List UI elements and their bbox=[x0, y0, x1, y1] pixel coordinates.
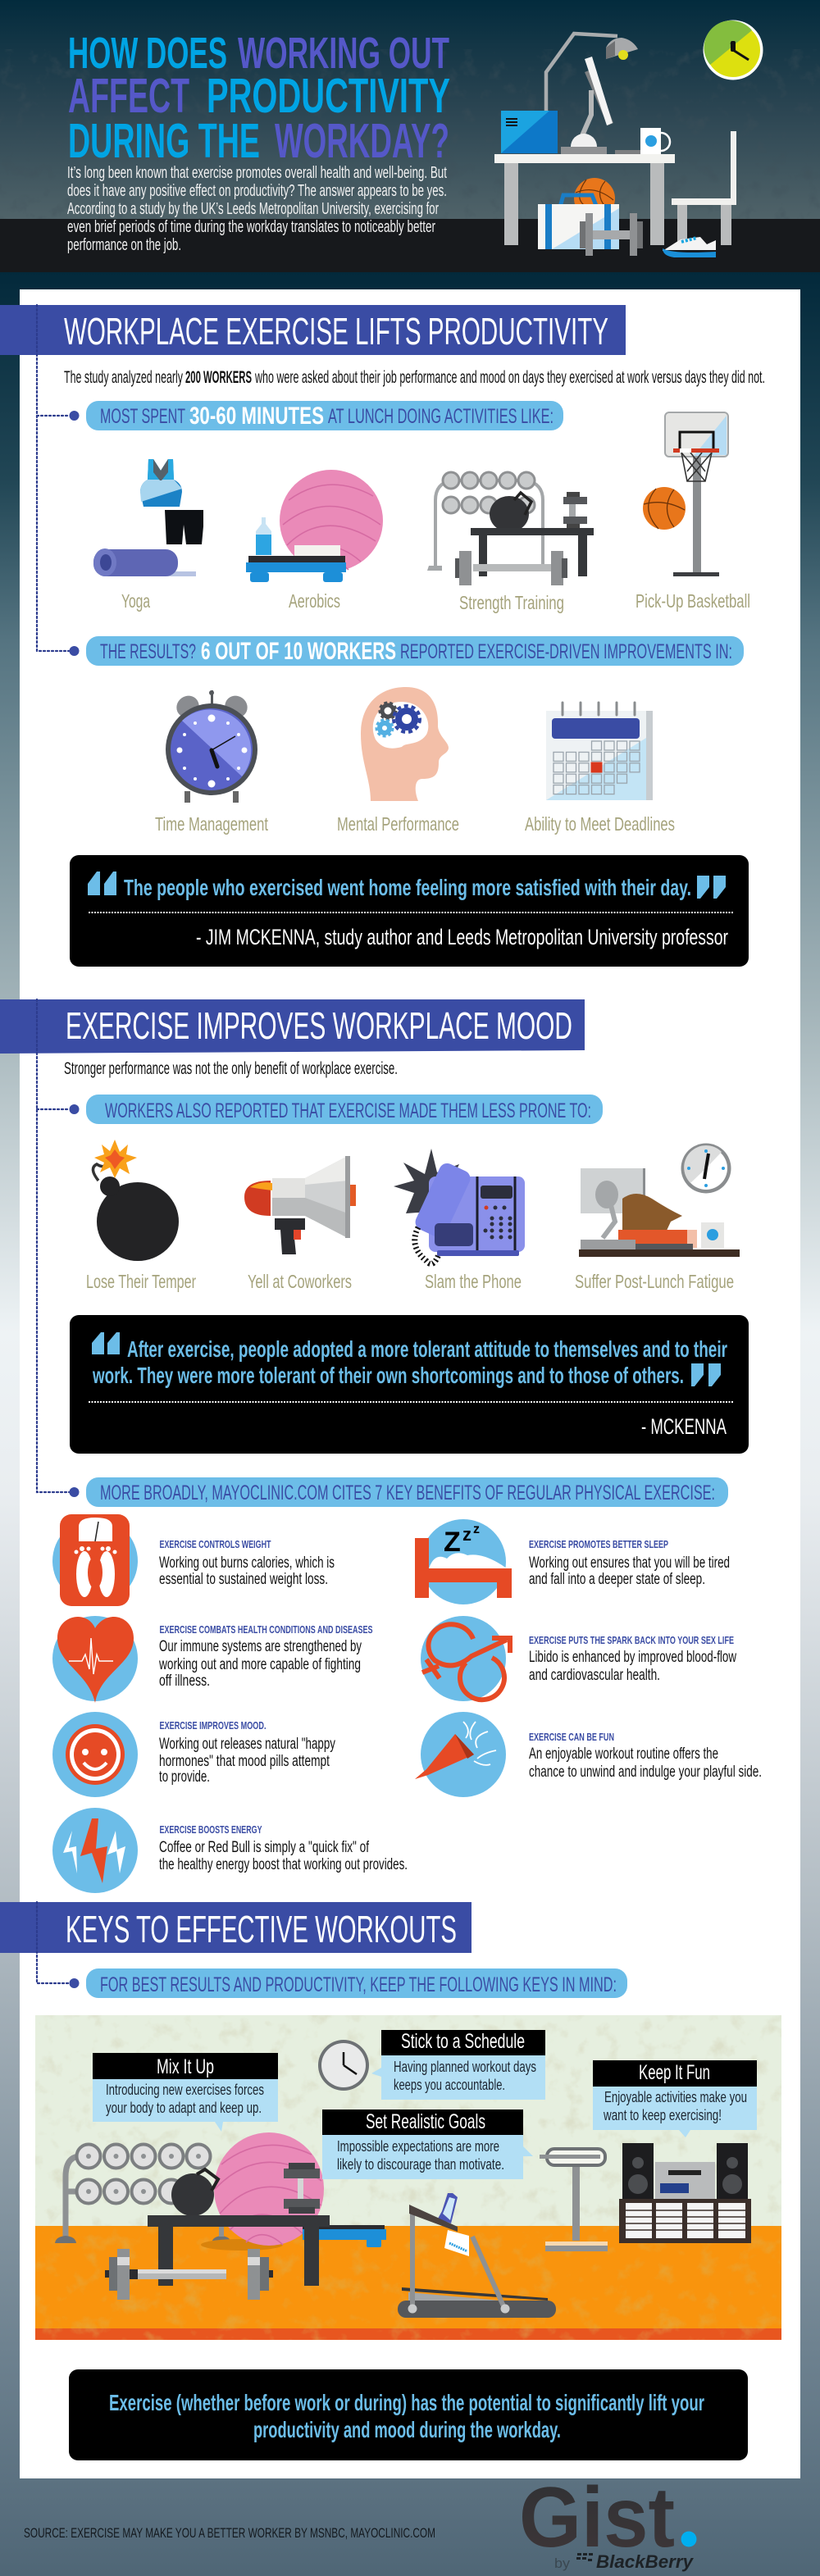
icon: smiley bbox=[52, 1712, 138, 1797]
intro text bbox=[64, 368, 765, 387]
icon: monitor bbox=[561, 57, 651, 154]
callout: stick to a schedule bbox=[371, 2030, 545, 2100]
callout: keep it fun bbox=[593, 2060, 757, 2137]
icon: bench bbox=[148, 2215, 330, 2286]
icon: mug bbox=[640, 128, 670, 154]
icon: bed with zzz: z bbox=[473, 1522, 480, 1536]
text: boosts energy: Coffee or Red Bull is simply a "quick fix" of bbox=[159, 1839, 370, 1856]
icon: alarm clock bbox=[166, 690, 257, 803]
text: combats health conditions: off illness. bbox=[159, 1673, 210, 1690]
callout: set realistic goals: likely to discourage than motivate. bbox=[337, 2156, 504, 2173]
title: WORKDAY? bbox=[275, 114, 449, 168]
text: improves mood: to provide. bbox=[159, 1768, 210, 1786]
icon: gender symbols bbox=[421, 1616, 510, 1701]
icon: mirror stand bbox=[540, 2149, 608, 2251]
connector line bbox=[37, 999, 79, 1497]
text: combats health conditions: EXERCISE COMBATS HEALTH CONDITIONS AND DISEASES bbox=[159, 1623, 373, 1636]
icon: bed with zzz bbox=[415, 1519, 512, 1604]
label: suffer post-lunch fatigue: Suffer Post-Lunch Fatigue bbox=[575, 1271, 734, 1292]
text: improves mood bbox=[159, 1719, 335, 1786]
benefit: combats health conditions bbox=[52, 1616, 373, 1703]
text: improves mood: hormones" that mood pills attempt bbox=[159, 1753, 330, 1770]
icon: lamp bbox=[546, 34, 638, 111]
benefit: better sleep bbox=[415, 1519, 730, 1604]
text: improves mood: EXERCISE IMPROVES MOOD. bbox=[159, 1719, 266, 1732]
callout: mix it up: Mix It Up bbox=[157, 2055, 214, 2078]
benefit: sex life bbox=[421, 1616, 736, 1701]
pill: the results: 6 OUT OF 10 WORKERS bbox=[201, 638, 396, 665]
label: mental performance: Mental Performance bbox=[337, 813, 459, 835]
intro paragraph: performance on the job. bbox=[67, 236, 181, 254]
icon: dumbbell bbox=[284, 2163, 320, 2214]
callout: mix it up: your body to adapt and keep up. bbox=[106, 2100, 262, 2116]
text: better sleep: Working out ensures that you will be tired bbox=[529, 1554, 730, 1572]
callout: keep it fun: Keep It Fun bbox=[639, 2061, 710, 2084]
text: combats health conditions: working out and more capable of fighting bbox=[158, 1656, 361, 1673]
callout: set realistic goals bbox=[322, 2109, 533, 2179]
intro paragraph: It’s long been known that exercise promotes overall health and well-being. But bbox=[67, 164, 447, 182]
benefit: controls weight bbox=[52, 1514, 335, 1606]
text: boosts energy bbox=[159, 1823, 408, 1873]
icon: desk bbox=[494, 154, 675, 245]
icon: tired worker at desk bbox=[579, 1143, 740, 1257]
icon: telephone bbox=[394, 1149, 525, 1264]
callout: mix it up: Introducing new exercises forces bbox=[106, 2082, 264, 2098]
intro paragraph: even brief periods of time during the workday translates to noticeably better bbox=[67, 218, 435, 236]
connector line bbox=[37, 1902, 79, 1988]
callout: stick to a schedule: keeps you accountable. bbox=[394, 2077, 505, 2093]
callout: mix it up bbox=[93, 2053, 278, 2132]
benefit: improves mood bbox=[52, 1712, 335, 1797]
icon: head with gears bbox=[361, 687, 449, 801]
section: keys to effective workouts bbox=[0, 1902, 781, 2460]
icon: yoga gear bbox=[93, 459, 203, 576]
text: sex life: Libido is enhanced by improved blood-flow bbox=[529, 1649, 736, 1666]
icon: aerobics ball and step bbox=[246, 470, 383, 582]
icon: sneaker bbox=[663, 237, 716, 257]
conclusion box bbox=[69, 2369, 748, 2460]
text: sex life bbox=[529, 1634, 736, 1684]
icon: step platform bbox=[303, 2225, 386, 2247]
text: better sleep bbox=[529, 1538, 730, 1588]
text: sex life: EXERCISE PUTS THE SPARK BACK INTO YOUR SEX LIFE bbox=[529, 1634, 734, 1646]
icon: treadmill bbox=[398, 2193, 556, 2318]
intro paragraph: According to a study by the UK’s Leeds Metropolitan University, exercising for bbox=[67, 200, 439, 218]
text: boosts energy: EXERCISE BOOSTS ENERGY bbox=[159, 1823, 262, 1836]
callout: keep it fun: want to keep exercising! bbox=[603, 2107, 722, 2123]
icon: kettlebell bbox=[171, 2169, 218, 2216]
text: sex life: and cardiovascular health. bbox=[529, 1667, 660, 1684]
icon: bed with zzz: z bbox=[462, 1524, 472, 1545]
title: HOW DOES bbox=[68, 29, 227, 78]
intro text: The study analyzed nearly bbox=[64, 368, 183, 387]
icon: exercise ball bbox=[201, 2132, 324, 2251]
text: combats health conditions: Our immune systems are strengthened by bbox=[159, 1638, 362, 1655]
intro paragraph: does it have any positive effect on productivity? The answer appears to be yes. bbox=[67, 182, 447, 200]
callout: set realistic goals: Set Realistic Goals bbox=[366, 2110, 485, 2133]
icon: chair bbox=[672, 131, 736, 245]
title: AFFECT bbox=[68, 69, 189, 123]
icon: bomb bbox=[93, 1140, 179, 1261]
quote box: McKenna 2 bbox=[70, 1315, 749, 1454]
pill: seven key benefits bbox=[86, 1477, 728, 1507]
label: lose their temper: Lose Their Temper bbox=[86, 1271, 196, 1292]
title: PRODUCTIVITY bbox=[207, 69, 450, 123]
text: can be fun: EXERCISE CAN BE FUN bbox=[529, 1731, 614, 1743]
conclusion box: productivity and mood during the workday. bbox=[253, 2417, 561, 2442]
section: workplace exercise lifts productivity bbox=[0, 305, 765, 967]
label: strength training: Strength Training bbox=[459, 592, 564, 613]
label: yoga: Yoga bbox=[121, 590, 150, 612]
text: controls weight: EXERCISE CONTROLS WEIGHT bbox=[159, 1538, 271, 1550]
heading bar bbox=[0, 1902, 472, 1953]
pill: best results bbox=[86, 1968, 627, 1998]
callout: set realistic goals: Impossible expectations are more bbox=[337, 2138, 499, 2155]
icon: weight rack bbox=[55, 2145, 231, 2243]
logo: Gist by BlackBerry: Gist bbox=[519, 2470, 675, 2565]
icon: office desk scene bbox=[494, 20, 763, 257]
icon: bed with zzz: Z bbox=[444, 1527, 461, 1558]
benefit: can be fun bbox=[415, 1712, 762, 1797]
callout: keep it fun: Enjoyable activities make you bbox=[604, 2089, 747, 2105]
pill: the results: THE RESULTS? bbox=[100, 640, 196, 663]
icon: basketball bbox=[574, 178, 615, 219]
text: can be fun: An enjoyable workout routine offers the bbox=[529, 1745, 718, 1763]
label: slam the phone: Slam the Phone bbox=[425, 1271, 522, 1292]
header band bbox=[0, 0, 820, 272]
heading bar: KEYS TO EFFECTIVE WORKOUTS bbox=[66, 1908, 457, 1950]
intro text: Stronger performance was not the only benefit of workplace exercise. bbox=[64, 1059, 398, 1078]
icon: barbell bbox=[105, 2249, 273, 2300]
label: yell at coworkers: Yell at Coworkers bbox=[248, 1271, 352, 1292]
quote box: McKenna 2: - MCKENNA bbox=[641, 1414, 727, 1439]
icon: dumbbell bbox=[580, 213, 643, 256]
pill: most spent: AT LUNCH DOING ACTIVITIES LIKE: bbox=[328, 405, 554, 428]
icon: megaphone bbox=[244, 1156, 356, 1254]
pill: most spent: 30-60 MINUTES bbox=[189, 403, 324, 430]
callout: stick to a schedule: Stick to a Schedule bbox=[401, 2030, 525, 2053]
pill: the results bbox=[86, 636, 744, 666]
icon: stereo and shelf bbox=[619, 2143, 751, 2243]
icon: schedule clock bbox=[318, 2040, 369, 2091]
heading bar bbox=[0, 305, 626, 355]
pill: most spent: MOST SPENT bbox=[100, 405, 185, 428]
text: better sleep: and fall into a deeper state of sleep. bbox=[529, 1571, 705, 1588]
icon: basketball hoop bbox=[643, 412, 728, 576]
source line: SOURCE: EXERCISE MAY MAKE YOU A BETTER WORKER BY MSNBC, MAYOCLINIC.COM bbox=[24, 2525, 435, 2541]
label: ability to meet deadlines: Ability to Meet Deadlines bbox=[525, 813, 675, 835]
icon: weights rack, bench and barbell bbox=[427, 472, 594, 585]
quote box: McKenna 1 bbox=[70, 855, 749, 967]
intro text: 200 WORKERS bbox=[185, 368, 252, 387]
gym scene panel bbox=[35, 2015, 781, 2340]
icon: party horn bbox=[415, 1712, 506, 1797]
title: WORKING OUT bbox=[238, 29, 449, 78]
label: time management: Time Management bbox=[155, 813, 268, 835]
text: controls weight bbox=[159, 1538, 335, 1588]
icon: gym bag bbox=[538, 195, 619, 249]
heading bar bbox=[0, 999, 585, 1054]
benefit: boosts energy bbox=[52, 1808, 408, 1893]
label: aerobics: Aerobics bbox=[289, 590, 340, 612]
text: controls weight: Working out burns calories, which is bbox=[159, 1554, 335, 1572]
section: exercise improves workplace mood bbox=[0, 999, 762, 1893]
text: can be fun bbox=[529, 1731, 762, 1781]
logo: Gist by BlackBerry: BlackBerry bbox=[596, 2551, 695, 2572]
text: combats health conditions bbox=[158, 1623, 373, 1690]
icon: computer tower bbox=[501, 111, 558, 153]
callout: stick to a schedule: Having planned workout days bbox=[394, 2059, 536, 2075]
icon: calendar bbox=[546, 703, 653, 800]
icon: bathroom scale bbox=[52, 1514, 138, 1606]
pill: less prone bbox=[86, 1095, 603, 1124]
text: improves mood: Working out releases natural "happy bbox=[159, 1736, 335, 1753]
icon: heart bbox=[52, 1616, 138, 1703]
title bbox=[68, 29, 450, 168]
title: DURING THE bbox=[68, 114, 260, 168]
text: boosts energy: the healthy energy boost that working out provides. bbox=[159, 1856, 408, 1873]
connector line bbox=[37, 305, 79, 656]
text: controls weight: essential to sustained weight loss. bbox=[159, 1571, 328, 1588]
pill: most spent bbox=[86, 401, 563, 430]
text: better sleep: EXERCISE PROMOTES BETTER SLEEP bbox=[529, 1538, 668, 1550]
label: pick-up basketball: Pick-Up Basketball bbox=[636, 590, 750, 612]
intro paragraph bbox=[67, 164, 447, 254]
icon: lightning bolts bbox=[52, 1808, 138, 1893]
logo: Gist by BlackBerry: by bbox=[554, 2556, 571, 2571]
icon: wall clock bbox=[704, 20, 763, 80]
